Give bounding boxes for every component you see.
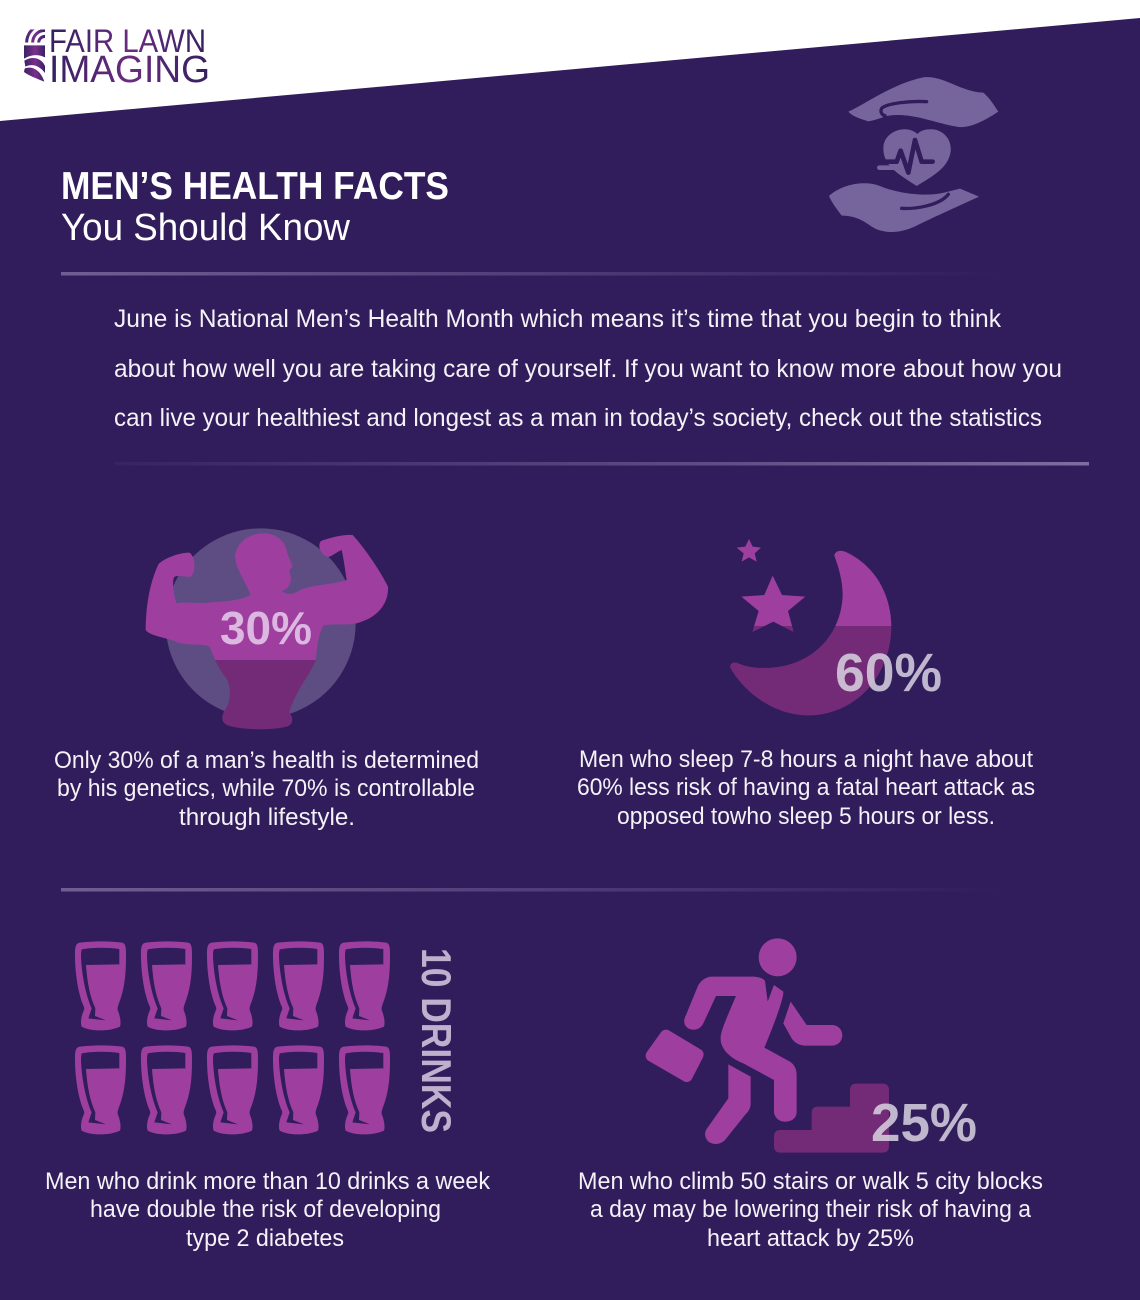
- caption: sleep: Men who sleep 7-8 hours a night have about: [579, 746, 1033, 773]
- logo: [24, 29, 208, 82]
- logo wordmark: FAIR LAWN: [49, 23, 206, 59]
- icon: muscular man: [146, 528, 388, 729]
- caption: drinks: type 2 diabetes: [186, 1225, 344, 1252]
- panel: drinks: [45, 941, 491, 1252]
- caption: stairs: [578, 1168, 1043, 1252]
- caption: genetics: by his genetics, while 70% is controllable: [57, 775, 475, 802]
- caption: stairs: heart attack by 25%: [707, 1225, 914, 1252]
- title: MEN’S HEALTH FACTS: [61, 165, 449, 208]
- stat: 25%: 25%: [871, 1093, 977, 1153]
- white header band: [0, 0, 1140, 121]
- intro paragraph: can live your healthiest and longest as a man in today’s society, check out the statistics: [114, 404, 1042, 432]
- logo mark: [24, 24, 45, 82]
- stat: 10 drinks: 10 DRINKS: [413, 948, 460, 1133]
- caption: sleep: 60% less risk of having a fatal heart attack as: [577, 774, 1035, 801]
- icon: hands holding heart: [829, 77, 998, 232]
- title: [61, 165, 449, 249]
- caption: genetics: [54, 747, 479, 831]
- icon: man climbing stairs: [652, 938, 889, 1153]
- caption: stairs: a day may be lowering their risk of having a: [590, 1196, 1032, 1223]
- caption: sleep: opposed towho sleep 5 hours or less.: [617, 803, 995, 830]
- caption: sleep: [577, 746, 1035, 830]
- caption: genetics: through lifestyle.: [179, 804, 355, 831]
- title: You Should Know: [61, 207, 351, 249]
- stat: 60%: 60%: [835, 643, 942, 703]
- intro paragraph: June is National Men’s Health Month which means it’s time that you begin to think: [114, 305, 1001, 333]
- logo: IMAGING: [49, 49, 210, 91]
- caption: drinks: [45, 1168, 491, 1252]
- caption: genetics: Only 30% of a man’s health is determined: [54, 747, 479, 774]
- stat: 30%: 30%: [220, 602, 312, 654]
- caption: drinks: Men who drink more than 10 drinks a week: [45, 1168, 491, 1195]
- panel: genetics 30%: [54, 528, 479, 831]
- intro paragraph: [114, 305, 1062, 432]
- caption: stairs: Men who climb 50 stairs or walk 5 city blocks: [578, 1168, 1043, 1195]
- panel: stairs 25%: [578, 938, 1043, 1252]
- caption: drinks: have double the risk of developing: [90, 1196, 441, 1223]
- icon: moon and stars: [730, 539, 891, 715]
- intro paragraph: about how well you are taking care of yourself. If you want to know more about how you: [114, 355, 1062, 383]
- icon: ten beer glasses: [75, 941, 390, 1134]
- panel: sleep 60%: [577, 539, 1035, 830]
